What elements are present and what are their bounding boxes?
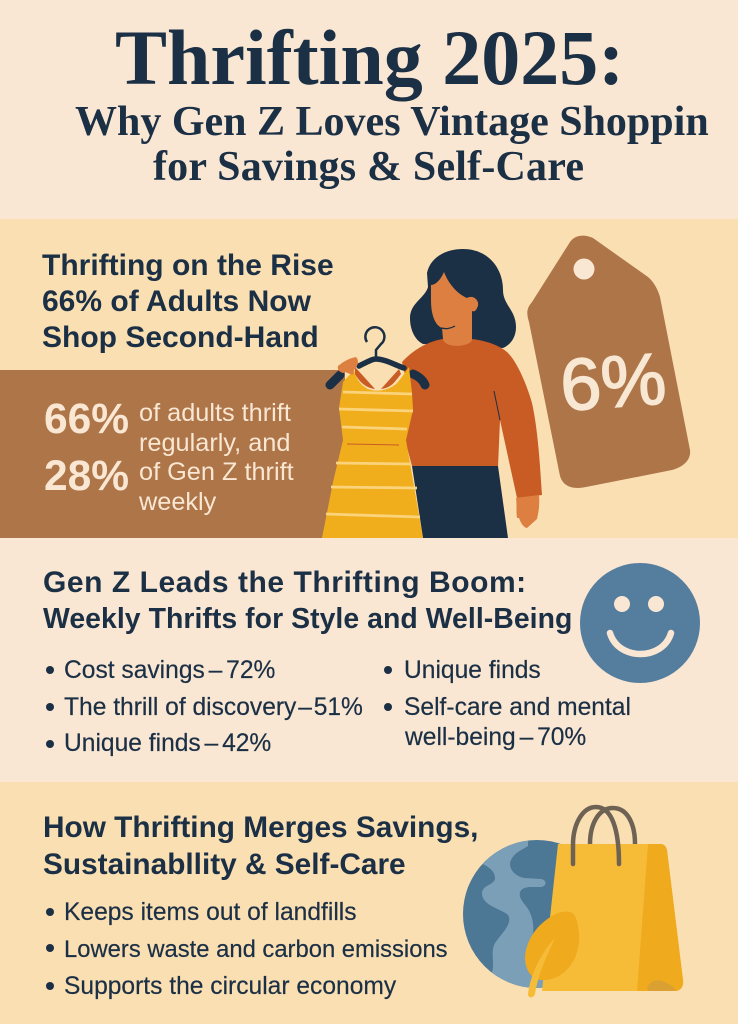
shopping bag <box>542 807 683 991</box>
list: right reasons: well-being – 70% <box>405 724 586 751</box>
list: left reasons: Cost savings – 72% <box>64 657 275 684</box>
heading: how thrifting merges: How Thrifting Merges Savings, <box>43 811 478 844</box>
list: left reasons: The thrill of discovery – 51% <box>64 694 363 721</box>
title: Thrifting 2025: <box>115 14 624 101</box>
stat description: of adults thrift <box>139 399 291 427</box>
hair <box>410 249 516 348</box>
list: right reasons <box>384 657 631 751</box>
dress <box>322 367 423 538</box>
dress neckline lining <box>355 367 401 389</box>
panel: title band <box>0 0 738 219</box>
heading: how thrifting merges <box>43 811 478 881</box>
panel: gen z leads <box>0 538 738 782</box>
panel: savings sustainability self-care <box>0 782 738 1024</box>
stat description: regularly, and <box>139 429 290 457</box>
list: benefits: Lowers waste and carbon emissions <box>64 936 448 963</box>
globe <box>463 840 560 988</box>
stat description: of Gen Z thrift <box>139 458 294 486</box>
heading: thrifting on the rise: Thrifting on the Rise <box>42 249 334 282</box>
sleeve crease <box>494 391 500 420</box>
list: right reasons: Self-care and mental <box>404 694 631 721</box>
icon: price tag: 6% <box>558 338 669 427</box>
subtitle: Why Gen Z Loves Vintage Shoppin <box>75 99 709 145</box>
heading: thrifting on the rise: 66% of Adults Now <box>42 285 311 318</box>
stat description <box>139 399 294 516</box>
stat: 28%: 28% <box>44 453 129 500</box>
subtitle: for Savings & Self-Care <box>153 144 584 190</box>
heading: thrifting on the rise: Shop Second-Hand <box>42 321 319 354</box>
waist seam <box>347 444 399 445</box>
heading: thrifting on the rise <box>42 249 334 354</box>
list: left reasons <box>46 657 363 757</box>
smile <box>441 326 455 329</box>
panel: thrifting on the rise <box>0 219 738 538</box>
list: benefits: Supports the circular economy <box>64 973 396 1000</box>
hand on hanger <box>338 357 358 375</box>
list: right reasons: Unique finds <box>404 657 541 684</box>
subtitle <box>75 99 709 190</box>
list: left reasons: Unique finds – 42% <box>64 730 271 757</box>
list: benefits: Keeps items out of landfills <box>64 899 357 926</box>
heading: gen z leads: Gen Z Leads the Thrifting Boom: <box>43 566 527 599</box>
heading: gen z leads: Weekly Thrifts for Style and Well-Being <box>43 603 572 635</box>
list: benefits <box>46 899 448 1000</box>
heading: how thrifting merges: Sustainabllity & Self-Care <box>43 848 406 881</box>
icon: price tag <box>527 236 690 488</box>
stats text <box>44 396 294 516</box>
stat: 66%: 66% <box>44 396 129 443</box>
skirt <box>412 466 508 538</box>
hanger <box>330 327 425 385</box>
leaf <box>525 912 579 997</box>
dress stripes <box>326 392 420 517</box>
sweater <box>402 339 542 498</box>
stat description: weekly <box>139 488 216 516</box>
neck and face <box>431 272 478 346</box>
brown stats band <box>0 370 345 538</box>
illustration: woman holding dress <box>322 249 542 538</box>
heading: gen z leads <box>43 566 572 635</box>
hand <box>516 495 539 528</box>
icon: smiley <box>580 563 700 683</box>
icon: globe and shopping bag <box>463 804 684 998</box>
